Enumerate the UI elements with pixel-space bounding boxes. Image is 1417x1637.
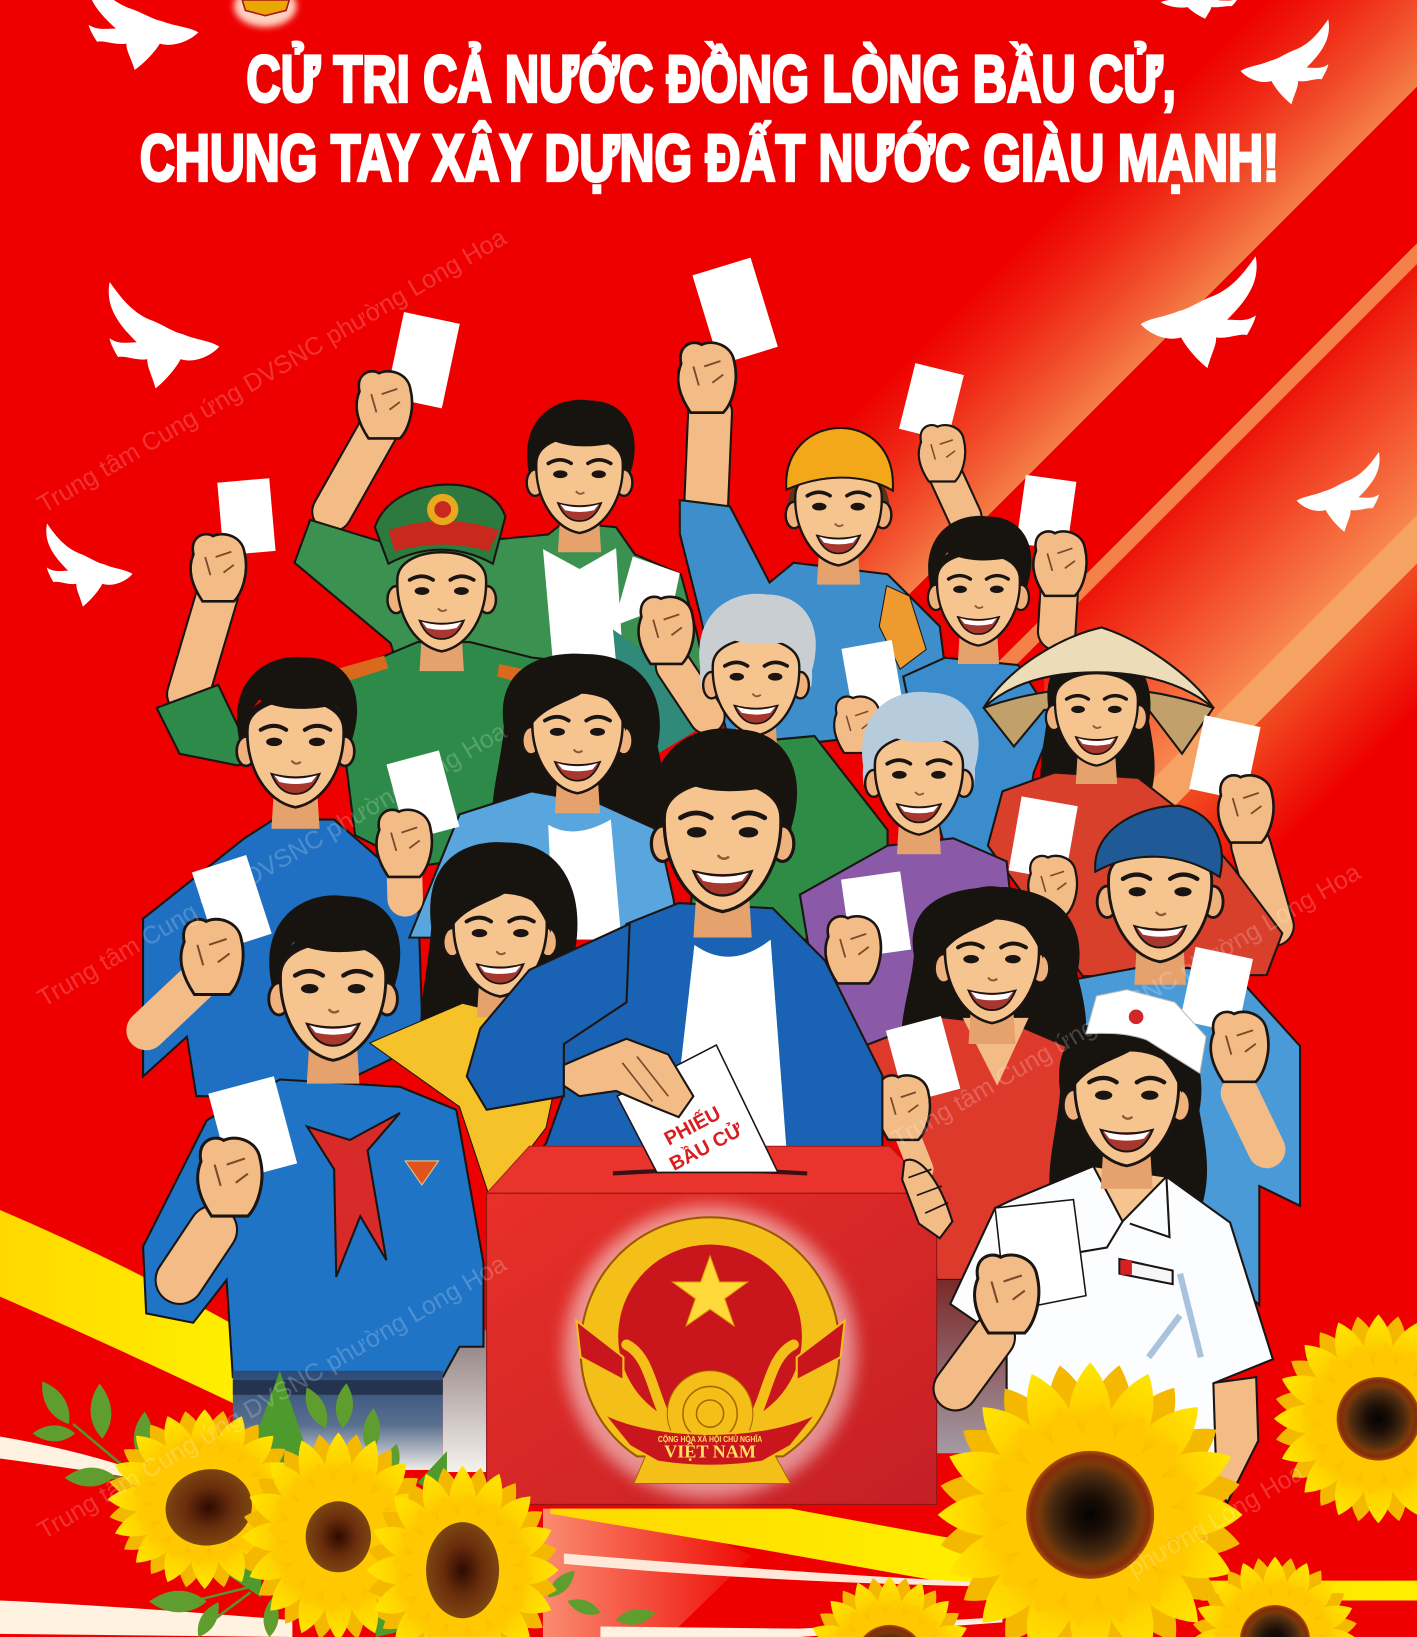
person: woman in yellow shirt: [370, 842, 583, 1201]
person: woman in red shirt: [864, 886, 1086, 1280]
person: elderly woman in purple: [800, 692, 1078, 1086]
person: soldier with green cap: [157, 478, 637, 867]
national emblem: [564, 1206, 856, 1498]
ballot with text PHIẾU BẦU CỬ: PHIẾU: [660, 1102, 725, 1150]
dove upper right: [1141, 256, 1257, 368]
hand dropping the ballot: [564, 1039, 693, 1117]
sunflower left 3: [303, 1397, 622, 1637]
sunflower bottom centre: [751, 1521, 1028, 1637]
dove top right: [1161, 0, 1238, 19]
person: woman in conical hat and red ao dai: [984, 627, 1282, 976]
title: [140, 41, 1279, 195]
person: nurse with white cap: [950, 990, 1273, 1503]
sunflower left 2: [179, 1364, 498, 1637]
ballot with text PHIẾU BẦU CỬ: [617, 1045, 778, 1176]
leaves around the left sunflowers: [33, 1371, 657, 1637]
background: diagonal orange light rays: [835, 0, 1417, 926]
person: young pioneer with red scarf: [143, 895, 483, 1470]
person: woman in light blue jacket: [376, 654, 679, 940]
fist gripping the box: [902, 1160, 952, 1238]
sunflower bottom right: [1136, 1502, 1413, 1637]
person: central man in blue jacket: [467, 728, 882, 1175]
national emblem: CỘNG HÒA XÃ HỘI CHỦ NGHĨA: [658, 1433, 762, 1444]
national emblem: VIỆT NAM: [664, 1441, 756, 1461]
logo at top: [234, 0, 297, 27]
sunflower left 1: [44, 1350, 366, 1637]
dove top left: [88, 0, 198, 70]
person: young man in green jacket, back row: [294, 312, 715, 773]
watermark right lower: phường Long Hoa: [1123, 1458, 1308, 1583]
ribbons behind the figures: [0, 1210, 1417, 1637]
ballot with text PHIẾU BẦU CỬ: BẦU CỬ: [665, 1117, 747, 1176]
person: worker with yellow helmet: [678, 258, 965, 752]
person: young man top right: [903, 475, 1087, 867]
ballot box: [487, 1146, 937, 1504]
dove right of title: [1241, 19, 1329, 104]
person: man with navy cap: [1076, 806, 1300, 1305]
person: man in blue shirt, left: [143, 657, 423, 1096]
dove mid left: [46, 524, 133, 607]
watermark right middle: Trung tâm Cung ứng DVSNC phường Long Hoa: [887, 858, 1365, 1154]
watermark upper: Trung tâm Cung ứng DVSNC phường Long Hoa: [33, 223, 511, 519]
person: elderly man with grey hair: [639, 594, 904, 940]
watermark lower: Trung tâm Cung ứng DVSNC phường Long Hoa: [33, 1250, 511, 1545]
dove upper left: [109, 282, 219, 388]
dove mid right: [1297, 452, 1380, 532]
watermark middle: Trung tâm Cung ứng DVSNC phường Long Hoa: [33, 717, 511, 1013]
sunflower large right: [837, 1262, 1343, 1637]
background panels behind figures at the bottom: [443, 1280, 1009, 1472]
sunflower far right: [1205, 1246, 1417, 1592]
